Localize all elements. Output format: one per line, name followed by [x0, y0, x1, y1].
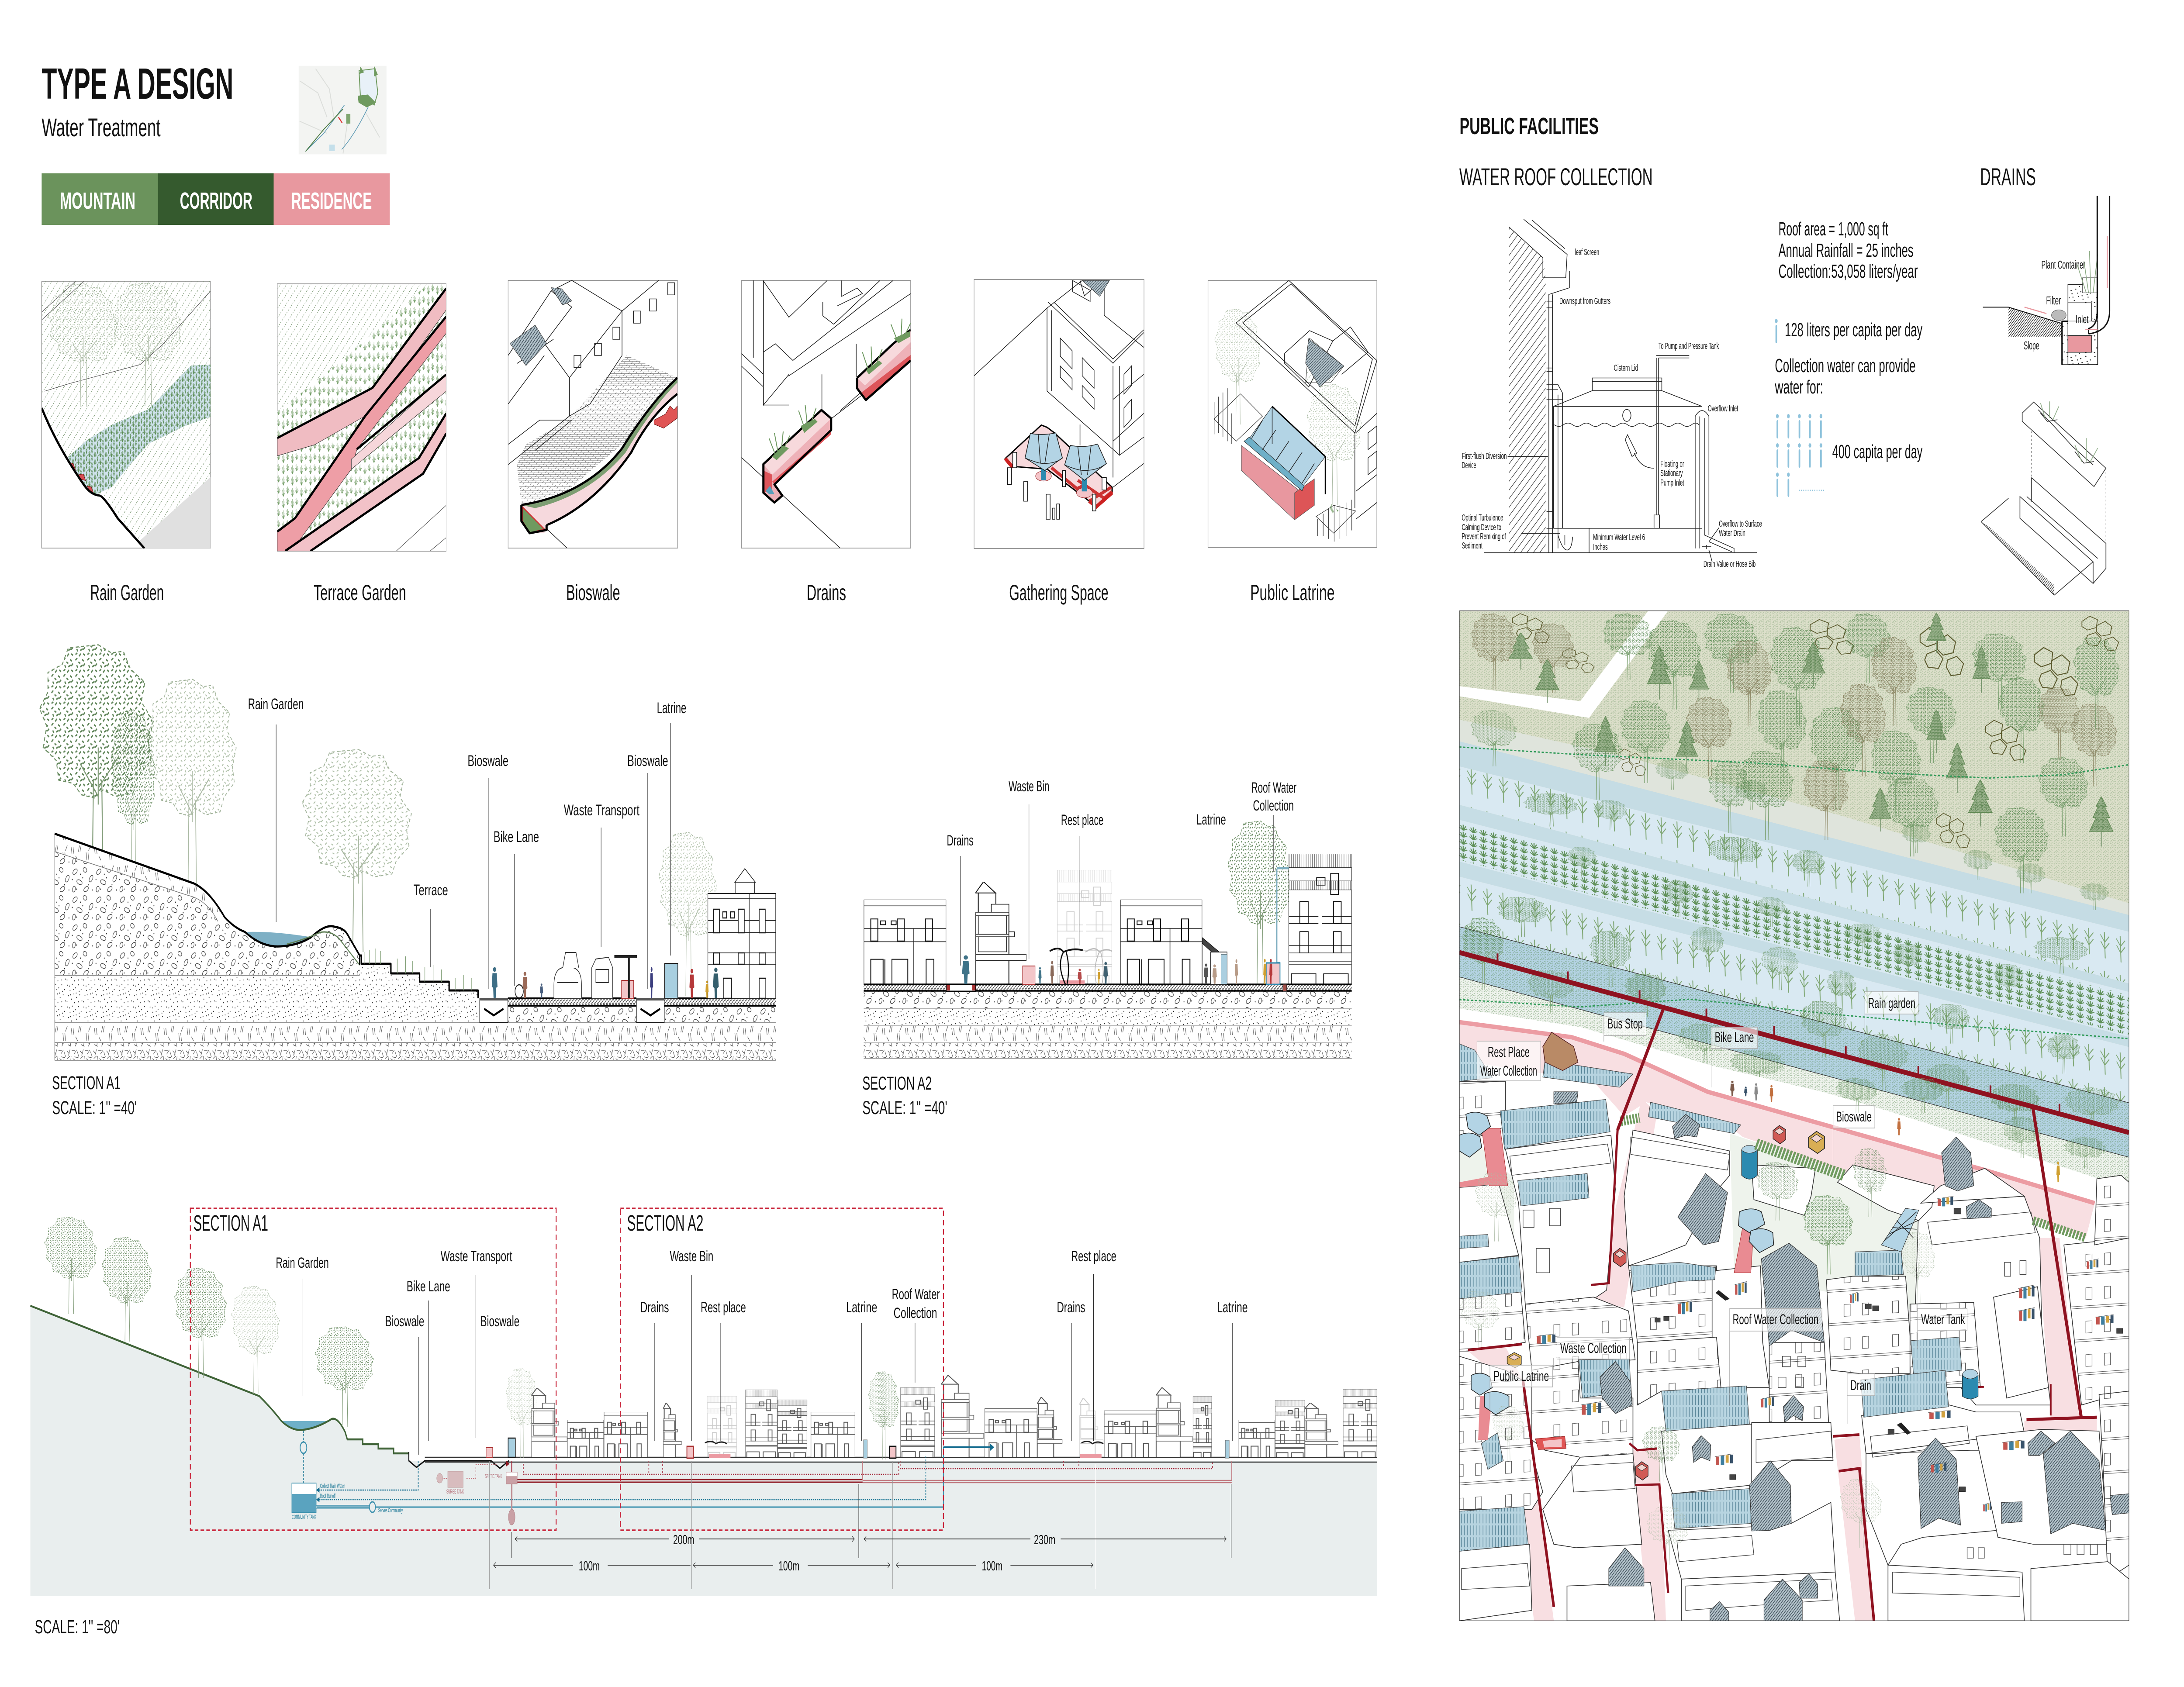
water use stats — [1775, 319, 1923, 497]
section A1 drawing — [40, 645, 776, 1060]
cistern diagram: Minimum Water Level 6 — [1593, 532, 1645, 542]
water use stats: 128 liters per capita per day — [1785, 319, 1923, 341]
map labels: Waste Collection — [1560, 1340, 1627, 1356]
section A2 labels: SCALE: 1'' =40' — [862, 1097, 947, 1118]
panel captions: Gathering Space — [1009, 580, 1109, 605]
water use stats: water for: — [1775, 376, 1823, 398]
map labels: Rest Place — [1488, 1044, 1530, 1060]
section A1 labels: SCALE: 1'' =40' — [52, 1097, 137, 1118]
section A2 labels: SECTION A2 — [862, 1073, 932, 1094]
cistern diagram: Drain Value or Hose Bib — [1704, 559, 1755, 569]
section A2 labels — [862, 778, 1296, 1118]
panel captions: Drains — [807, 580, 846, 605]
long section dimensions: 200m — [673, 1533, 695, 1547]
section A1 labels — [52, 696, 686, 1118]
long section dashed frames — [190, 1208, 943, 1530]
long section labels: Roof Water — [892, 1286, 940, 1303]
section A2 labels: Latrine — [1196, 811, 1226, 828]
long section pipe network: Collect Rain Water — [320, 1483, 345, 1490]
drain section diagram: Inlet — [2076, 313, 2088, 326]
cistern diagram: Calming Device to — [1462, 522, 1501, 532]
map labels: Bus Stop — [1607, 1016, 1643, 1032]
legend bar — [41, 173, 390, 225]
rainfall facts: Roof area = 1,000 sq ft — [1779, 218, 1888, 240]
cistern diagram: Prevent Remixing of — [1462, 531, 1506, 542]
panel captions: Terrace Garden — [314, 580, 406, 605]
long section labels — [276, 1248, 1248, 1455]
cistern diagram: Overflow to Surface — [1719, 519, 1762, 529]
long section labels: Bioswale — [480, 1313, 519, 1330]
cistern diagram: To Pump and Pressure Tank — [1659, 341, 1719, 351]
map labels: Rain garden — [1868, 995, 1915, 1011]
rainfall facts: Collection:53,058 liters/year — [1779, 261, 1918, 282]
cistern diagram: Stationary — [1660, 468, 1683, 478]
cistern diagram: Pump Inlet — [1660, 478, 1684, 488]
map labels: Bike Lane — [1715, 1029, 1754, 1045]
section A2 labels: Drains — [947, 832, 974, 849]
long section ground — [30, 1306, 1377, 1596]
water use stats: Collection water can provide — [1775, 355, 1915, 376]
long section dimensions: 230m — [1034, 1533, 1055, 1547]
cistern diagram — [1462, 219, 1762, 569]
cistern diagram: Optinal Turbulence — [1462, 513, 1503, 523]
long section dimensions: 100m — [778, 1559, 799, 1573]
panel: bioswale — [508, 280, 677, 548]
long section street elements — [486, 1438, 1229, 1458]
cistern diagram: Overflow Inlet — [1708, 404, 1738, 414]
long section pipe network: SEPTIC TANK — [485, 1473, 502, 1480]
long section pipe network: Serves Community — [378, 1507, 403, 1514]
subtitle: Water Treatment — [41, 114, 161, 142]
cistern diagram: Sediment — [1462, 541, 1482, 551]
cistern diagram: Downsput from Gutters — [1559, 296, 1610, 306]
section A2 drawing — [864, 821, 1352, 1059]
drain section diagram: Filter — [2046, 294, 2061, 307]
cistern diagram: Water Drain — [1719, 528, 1745, 538]
long section scale: SCALE: 1'' =80' — [35, 1616, 120, 1638]
map labels: Water Tank — [1921, 1311, 1965, 1327]
cistern diagram: Inches — [1593, 542, 1608, 552]
map labels — [1477, 992, 1967, 1424]
panel captions: Rain Garden — [90, 580, 164, 605]
section A2 labels: Waste Bin — [1009, 778, 1049, 795]
long section labels: Bioswale — [385, 1313, 424, 1330]
long section labels: Drains — [640, 1299, 669, 1316]
section A1 labels: Rain Garden — [248, 696, 304, 713]
drain section diagram: Slope — [2024, 339, 2039, 352]
section A2 labels: Roof Water — [1251, 780, 1296, 796]
long section dashed frames: SECTION A2 — [627, 1211, 703, 1236]
panel: public latrine — [1208, 280, 1377, 548]
long section labels: Rest place — [1071, 1248, 1116, 1265]
panel: gathering space — [974, 279, 1144, 549]
rainfall facts: Annual Rainfall = 25 inches — [1779, 240, 1913, 261]
rainfall facts — [1779, 218, 1918, 282]
long section dimensions: 100m — [579, 1559, 600, 1573]
long section pipe network: COMMUNITY TANK — [292, 1514, 316, 1521]
section A2 labels: Rest place — [1061, 812, 1103, 828]
cistern diagram: leaf Screen — [1575, 247, 1599, 257]
long section dimensions — [489, 1461, 1231, 1589]
legend bar: MOUNTAIN — [60, 187, 135, 214]
cistern diagram: Floating or — [1660, 459, 1684, 469]
legend bar: CORRIDOR — [180, 187, 252, 214]
map: road and city — [1459, 1008, 2129, 1621]
section A1 labels: Bike Lane — [494, 829, 539, 845]
panel captions: Public Latrine — [1250, 580, 1334, 605]
map labels: Water Collection — [1480, 1063, 1537, 1079]
long section pipe network: SURGE TANK — [446, 1488, 464, 1495]
long section pipe network: Roof Runoff — [320, 1493, 335, 1500]
section A1 labels: Waste Transport — [564, 802, 639, 819]
section A1 labels: Latrine — [657, 700, 686, 717]
section A1 labels: Bioswale — [627, 753, 668, 769]
cistern diagram: Device — [1462, 460, 1476, 470]
long section labels: Latrine — [1217, 1299, 1248, 1316]
title: TYPE A DESIGN — [41, 59, 233, 108]
legend bar: RESIDENCE — [291, 187, 372, 214]
long section labels: Collection — [894, 1305, 937, 1321]
section A1 labels: Bioswale — [467, 753, 508, 769]
long section labels: Waste Bin — [670, 1248, 713, 1265]
drains heading: DRAINS — [1980, 163, 2036, 190]
drain exploded isometric — [1981, 401, 2106, 595]
section A1 labels: SECTION A1 — [52, 1072, 121, 1094]
map labels: Drain — [1850, 1377, 1871, 1393]
map labels: Roof Water Collection — [1733, 1311, 1818, 1327]
long section labels: Waste Transport — [441, 1248, 512, 1265]
panel captions — [90, 580, 1334, 605]
long section labels: Drains — [1057, 1299, 1085, 1316]
map labels: Public Latrine — [1493, 1368, 1549, 1384]
long section dashed frames: SECTION A1 — [194, 1211, 268, 1236]
public facilities heading: PUBLIC FACILITIES — [1460, 113, 1599, 139]
panel: rain garden — [41, 281, 211, 549]
drain section diagram: Plant Container — [2041, 258, 2085, 271]
cistern diagram: Cistern Lid — [1614, 363, 1638, 373]
long section pipe network — [292, 1431, 1232, 1525]
site axonometric map — [1459, 611, 2129, 1621]
map labels: Bioswale — [1836, 1109, 1872, 1125]
map: upper landscape — [1459, 611, 2129, 1238]
long section labels: Latrine — [846, 1299, 877, 1316]
water roof collection heading: WATER ROOF COLLECTION — [1459, 163, 1653, 190]
section A2 labels: Collection — [1253, 797, 1294, 814]
drain section diagram — [1983, 196, 2110, 365]
cistern diagram: First-flush Diversion — [1462, 451, 1507, 461]
long section trees — [45, 1217, 899, 1459]
long section labels: Rest place — [701, 1299, 746, 1316]
section A1 labels: Terrace — [414, 882, 448, 899]
panel: drains — [741, 280, 911, 548]
map: frame — [1459, 611, 2129, 1621]
long section buildings — [531, 1375, 1377, 1457]
long section labels: Bike Lane — [407, 1278, 450, 1295]
panel: terrace garden — [277, 284, 446, 551]
water use stats: 400 capita per day — [1832, 441, 1923, 462]
site key map — [299, 66, 387, 154]
panel captions: Bioswale — [566, 580, 620, 605]
long section dimensions: 100m — [982, 1559, 1002, 1573]
long section labels: Rain Garden — [276, 1255, 329, 1271]
